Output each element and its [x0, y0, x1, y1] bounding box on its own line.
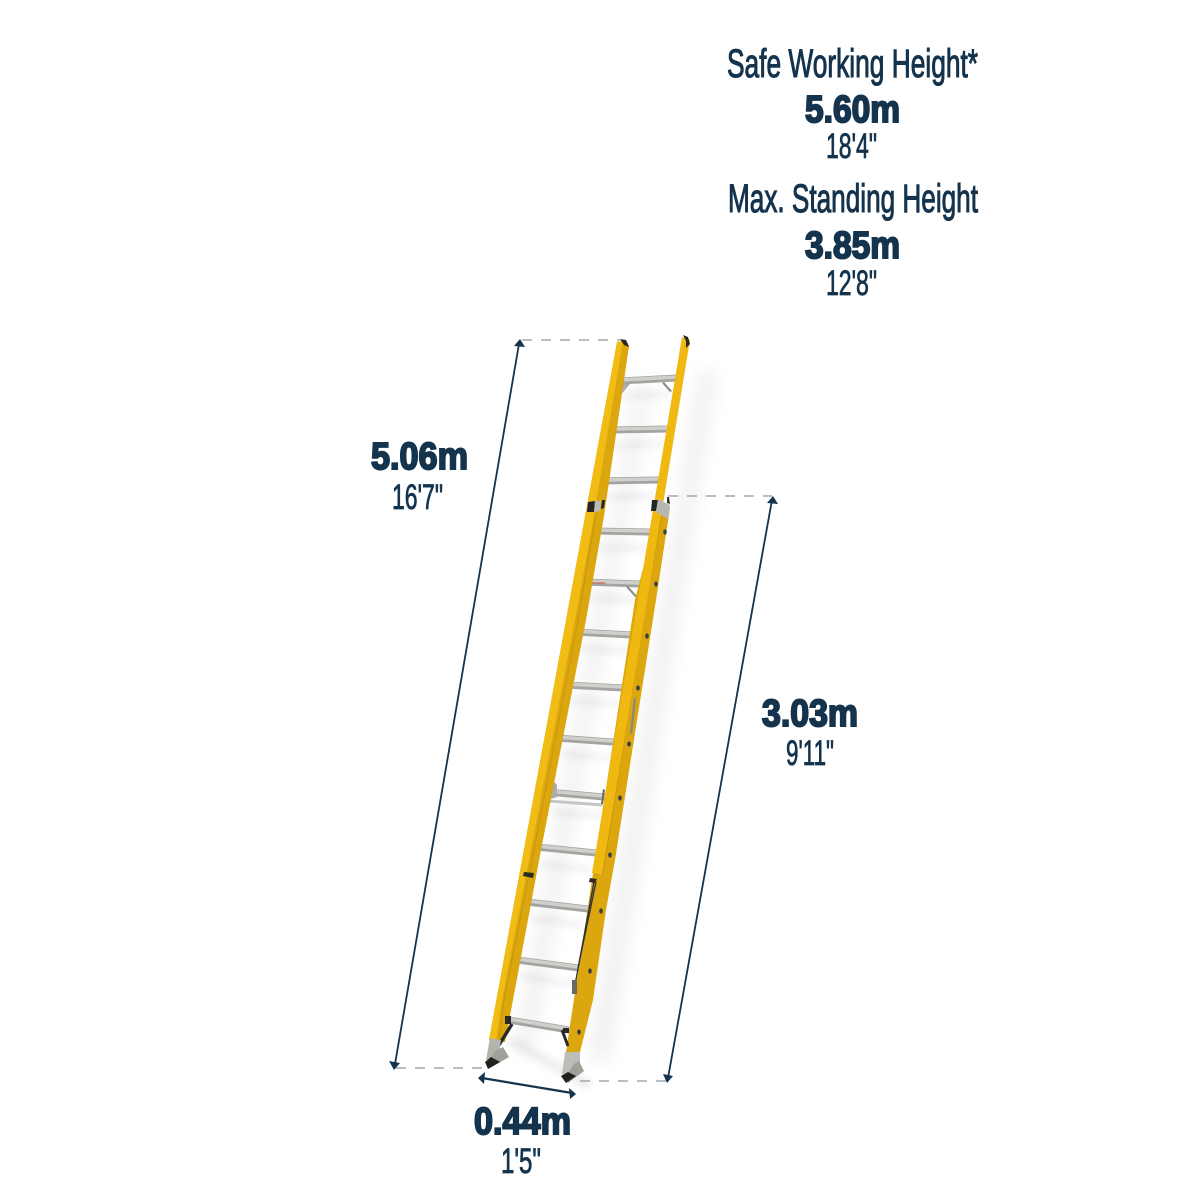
- rung shadows: [510, 394, 672, 1086]
- left rail: [489, 340, 629, 1042]
- ladder shadow: [518, 370, 714, 1060]
- heading: safe working height: Safe Working Height*: [727, 42, 978, 86]
- heading: max standing height: Max. Standing Height: [728, 177, 978, 221]
- base rail bolts: [577, 529, 667, 1035]
- arrow: overall extended length: [389, 339, 525, 1070]
- rungs: [509, 377, 676, 1030]
- rope and pulley: [572, 882, 596, 994]
- label: width: 1'5": [501, 1142, 541, 1181]
- left foot: [485, 1016, 512, 1069]
- heading: safe working height: 5.60m: [805, 89, 900, 131]
- right foot: [561, 1028, 584, 1083]
- ladder illustration: [485, 335, 714, 1086]
- heading: max standing height: [728, 177, 978, 303]
- heading: max standing height: 12'8": [826, 264, 877, 303]
- dashed guide lines: [396, 340, 772, 1081]
- right rail: base section: [566, 506, 670, 1052]
- heading: safe working height: 18'4": [826, 127, 877, 166]
- right rail: fly section: [592, 337, 690, 875]
- arrow: closed length: [663, 496, 778, 1083]
- arrow: width: [478, 1072, 576, 1099]
- heading: safe working height: [727, 42, 978, 166]
- label: extended length: [371, 436, 468, 517]
- label: width: [474, 1101, 571, 1181]
- heading: max standing height: 3.85m: [805, 225, 900, 267]
- label: closed length: 3.03m: [762, 693, 858, 735]
- label: width: 0.44m: [474, 1101, 571, 1143]
- top caps and guides: [523, 335, 690, 883]
- label: closed length: 9'11": [786, 734, 834, 773]
- braces and locks: [543, 382, 672, 805]
- label: extended length: 16'7": [392, 478, 443, 517]
- label: extended length: 5.06m: [371, 436, 468, 478]
- label: closed length: [762, 693, 858, 773]
